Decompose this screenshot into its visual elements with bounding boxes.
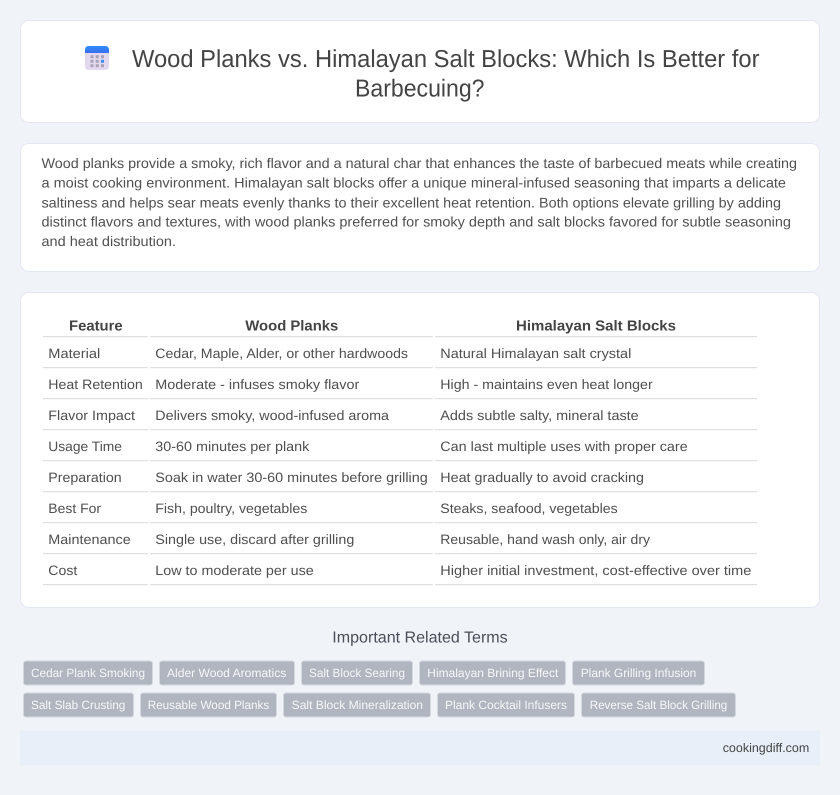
table row: Cost: Low to moderate per use (155, 563, 314, 578)
icon: calendar (85, 46, 109, 70)
table row: Preparation: Soak in water 30-60 minutes before grilling (155, 470, 428, 485)
table header row (69, 319, 676, 335)
table row: Flavor Impact: Delivers smoky, wood-infused aroma (155, 408, 389, 423)
table row: Cost: Higher initial investment, cost-effective over time (440, 563, 751, 578)
tag: Salt Block Searing (309, 666, 405, 680)
tag: Reverse Salt Block Grilling (590, 698, 727, 712)
panel: description: and heat distribution. (42, 233, 176, 249)
tag (284, 693, 430, 717)
table row: Maintenance: Single use, discard after grilling (155, 532, 354, 547)
table row: Flavor Impact: Flavor Impact (48, 408, 135, 423)
title: Wood Planks vs. Himalayan Salt Blocks: Which Is Better for (132, 46, 760, 73)
table row: Heat Retention (48, 377, 653, 392)
table row: Usage Time (48, 439, 688, 454)
panel: header (20, 20, 820, 122)
table row: Best For: Steaks, seafood, vegetables (440, 501, 618, 516)
tag (24, 693, 134, 717)
table row: Usage Time: Can last multiple uses with proper care (440, 439, 688, 454)
heading: related terms: Important Related Terms (332, 630, 508, 647)
tag: Plank Grilling Infusion (581, 666, 696, 680)
table row: Preparation (48, 470, 644, 485)
tag (24, 661, 152, 685)
table row: Cost (48, 563, 751, 578)
panel: comparison table (20, 292, 820, 608)
table row: Best For: Best For (48, 501, 101, 516)
table row: Preparation: Preparation (48, 470, 122, 485)
table row: Best For (48, 501, 618, 516)
table row: Heat Retention: Heat Retention (48, 377, 143, 392)
table row: Heat Retention: Moderate - infuses smoky flavor (155, 377, 360, 392)
footer: cookingdiff.com (723, 741, 809, 755)
table row: Heat Retention: High - maintains even heat longer (440, 377, 653, 392)
table row: Usage Time: 30-60 minutes per plank (155, 439, 310, 454)
tag (438, 693, 574, 717)
table row: Maintenance: Reusable, hand wash only, air dry (440, 532, 650, 547)
tag: Salt Slab Crusting (31, 698, 125, 712)
table row: Material: Cedar, Maple, Alder, or other hardwoods (155, 346, 408, 361)
table row: Maintenance (48, 532, 650, 547)
title (132, 46, 760, 102)
table row: Flavor Impact (48, 408, 639, 423)
tag (160, 661, 294, 685)
table header row: Himalayan Salt Blocks (516, 319, 676, 335)
panel: description: Wood planks provide a smoky, rich flavor and a natural char that enhances the taste of barbecued meats while creating (42, 155, 797, 171)
footer (20, 731, 820, 765)
panel: description: a moist cooking environment. Himalayan salt blocks offer a unique mineral-infused seasoning that imparts a delicate (42, 174, 786, 190)
table row: Material: Material (48, 346, 100, 361)
panel: description: saltiness and helps sear meats evenly thanks to their excellent heat retention. Both options elevate grilling by adding (42, 194, 781, 210)
tag (302, 661, 412, 685)
table row: Preparation: Heat gradually to avoid cracking (440, 470, 644, 485)
tag: Alder Wood Aromatics (167, 666, 286, 680)
table row: Cost: Cost (48, 563, 78, 578)
table row: Maintenance: Maintenance (48, 532, 131, 547)
panel: description (20, 144, 820, 272)
table row: Usage Time: Usage Time (48, 439, 122, 454)
tag (582, 693, 736, 717)
tag (572, 661, 704, 685)
title: Barbecuing? (355, 76, 484, 102)
table header row: Feature (69, 319, 123, 335)
tag (420, 661, 566, 685)
tag (140, 693, 276, 717)
table row: Material (48, 346, 631, 361)
panel: description: distinct flavors and textures, with wood planks preferred for smoky depth and salt blocks favored for subtle seasoning (42, 214, 791, 230)
tag: Reusable Wood Planks (148, 698, 269, 712)
tag: Cedar Plank Smoking (31, 666, 145, 680)
table row: Flavor Impact: Adds subtle salty, mineral taste (440, 408, 639, 423)
tag: Himalayan Brining Effect (427, 666, 559, 680)
table row: Best For: Fish, poultry, vegetables (155, 501, 307, 516)
tag: Plank Cocktail Infusers (445, 698, 567, 712)
tags: related terms (24, 661, 736, 717)
table header row: Wood Planks (245, 319, 338, 335)
tag: Salt Block Mineralization (292, 698, 423, 712)
table row: Material: Natural Himalayan salt crystal (440, 346, 631, 361)
